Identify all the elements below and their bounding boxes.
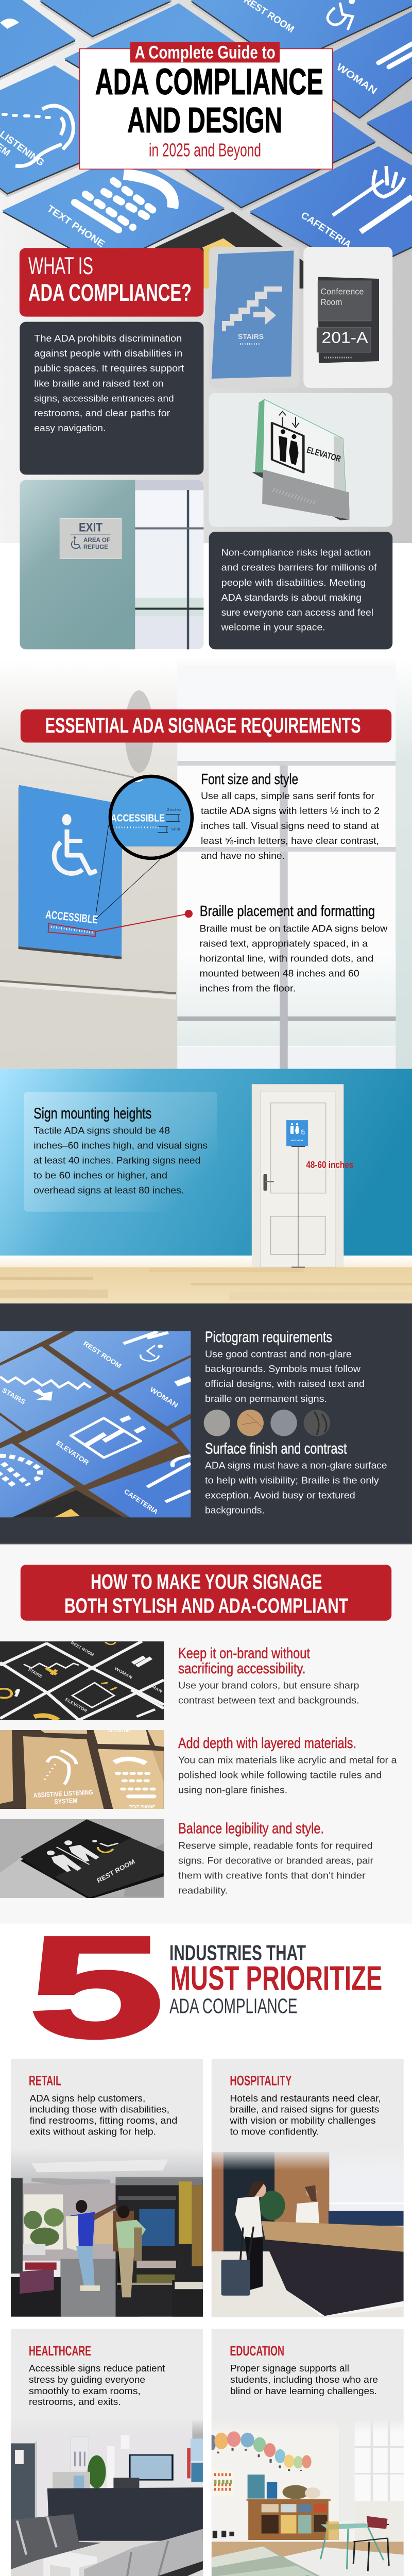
panel: non-compliance text: ADA standards is about making: [221, 592, 362, 603]
text: add depth with layered materials: You can mix materials like acrylic and metal for a: [178, 1755, 398, 1765]
text: font size and style: Font size and style: [201, 771, 298, 788]
text: keep it on-brand: Keep it on-brand without: [178, 1646, 310, 1662]
heading panel: what is ADA compliance: ADA COMPLIANCE?: [28, 279, 192, 306]
window frame and scenery: [177, 761, 396, 1069]
icon: wheelchair: [54, 814, 97, 873]
banner: how to make your signage: HOW TO MAKE YOUR SIGNAGE: [91, 1570, 322, 1594]
text: pictogram requirements: Use good contrast and non-glare: [205, 1349, 352, 1359]
text: balance legibility and style: Balance legibility and style.: [178, 1821, 324, 1837]
photo card: conference room sign: 201-A: [321, 329, 368, 347]
panel: ADA definition text: signs, accessible entrances and: [34, 393, 174, 403]
blue accessible sign: ACCESSIBLE: [45, 908, 98, 926]
photo: black signs on white: STAIRS: [27, 1667, 43, 1679]
title: ADA Compliance and Design: AND DESIGN: [127, 100, 282, 140]
hero photo: blue ADA signs laid out diagonally: [0, 0, 412, 289]
title label: A Complete Guide to: A Complete Guide to: [135, 43, 276, 63]
banner: essential ADA signage requirements: [21, 709, 391, 742]
text: education: Proper signage supports all: [230, 2363, 349, 2374]
photo: blue signs on wood: [0, 1331, 191, 1517]
label: 48-60 inches: 48-60 inches: [306, 1159, 353, 1170]
text: retail: [29, 2073, 177, 2137]
subtitle: in 2025 and Beyond: [149, 140, 261, 161]
door with sign: [252, 1084, 353, 1267]
small restroom sign: [286, 1120, 308, 1146]
text: font size and style: [201, 771, 380, 861]
photo: black rest room sign: REST ROOM: [96, 1858, 136, 1885]
text: hospitality: with vision or mobility challenges: [229, 2115, 376, 2126]
heading text: [169, 1941, 382, 2018]
text: education: EDUCATION: [230, 2343, 284, 2359]
exit plaque: AREA OF: [83, 536, 110, 544]
heading panel: what is ADA compliance: WHAT IS: [28, 252, 93, 279]
photo: gold signs on wood: ELEVATOR: [108, 1728, 130, 1733]
photo: black signs on white: ELEVATOR: [64, 1697, 88, 1714]
text: hero sign labels: CAFETERIA: [299, 210, 353, 250]
magnified detail of sign text: [108, 775, 194, 860]
photo: gold signs on wood: ASSISTIVE LISTENING: [33, 1788, 93, 1799]
text: surface finish and contrast: ADA signs must have a non-glare surface: [205, 1461, 387, 1471]
text: surface finish and contrast: [205, 1440, 387, 1516]
text: retail: exits without asking for help.: [30, 2127, 156, 2137]
heading text: INDUSTRIES THAT: [169, 1941, 306, 1965]
text: braille placement and formatting: inches from the floor.: [200, 983, 296, 993]
text: hospitality: HOSPITALITY: [230, 2073, 291, 2089]
photo: blue signs on wood: REST ROOM: [82, 1340, 123, 1370]
panel: non-compliance text: welcome in your space.: [221, 622, 325, 633]
panel: non-compliance text: and creates barriers for millions of: [221, 563, 377, 573]
photo: blue signs on wood: STAIRS: [1, 1386, 27, 1406]
blue accessible sign: [19, 785, 122, 959]
photo: gold signs on wood: [0, 1728, 164, 1809]
photo: blue signs on wood: ELEVATOR: [55, 1439, 91, 1467]
small restroom sign: REST ROOM: [291, 1139, 303, 1142]
photo: gold signs on wood: TEXT PHONE: [129, 1805, 156, 1809]
title: ADA Compliance and Design: [95, 62, 323, 140]
text: font size and style: tactile ADA signs with letters ½ inch to 2: [201, 806, 380, 816]
text: balance legibility and style: Reserve simple, readable fonts for required: [178, 1841, 373, 1851]
glass text panel: Sign mounting heights: [33, 1105, 151, 1122]
panel: non-compliance text: sure everyone can access and feel: [221, 607, 373, 618]
card: hospitality: [212, 2059, 404, 2317]
photo: hotel reception: [212, 2148, 404, 2317]
text: healthcare: [29, 2343, 165, 2407]
card: education: [209, 2329, 404, 2576]
measuring line: [291, 1146, 305, 1267]
photo: blue signs on wood: CAFETERIA: [123, 1487, 160, 1516]
exit plaque: EXIT: [79, 520, 102, 534]
text: add depth with layered materials: [178, 1735, 398, 1795]
photo card: elevator sign: [209, 393, 392, 527]
title box: [80, 42, 332, 169]
text: healthcare: HEALTHCARE: [29, 2343, 91, 2359]
text: keep it on-brand: Use your brand colors, but ensure sharp: [178, 1681, 359, 1691]
wall lines: [0, 748, 176, 997]
text: keep it on-brand: sacrificing accessibility.: [178, 1660, 305, 1677]
text: balance legibility and style: [178, 1821, 373, 1895]
photo card: elevator sign: ELEVATOR: [305, 445, 342, 464]
magnified detail of sign text: 2 inches: [167, 807, 181, 812]
photo: blue signs on wood: WOMAN: [148, 1385, 180, 1409]
text: healthcare: restrooms, and exits.: [29, 2397, 121, 2407]
photo: retail store: [11, 2148, 203, 2318]
banner: how to make your signage: [21, 1565, 391, 1621]
photo: gold signs on wood: SYSTEM: [54, 1797, 78, 1805]
callout lines to magnifier: [96, 825, 160, 919]
text: add depth with layered materials: polished look while following tactile rules and: [178, 1770, 382, 1780]
text: education: students, including those who are: [230, 2375, 378, 2385]
text: hospitality: Hotels and restaurants need clear,: [230, 2093, 381, 2104]
glass text panel: inches–60 inches high, and visual signs: [33, 1140, 208, 1150]
text: surface finish and contrast: Surface finish and contrast: [205, 1440, 347, 1457]
panel: non-compliance text: [209, 532, 392, 649]
braille highlight box: [48, 923, 96, 937]
glass text panel: at least 40 inches. Parking signs need: [33, 1156, 200, 1166]
text: hero sign labels: TEXT PHONE: [45, 204, 107, 250]
exit plaque: REFUGE: [83, 544, 108, 551]
section: essential ADA signage requirements: [0, 659, 412, 1069]
text: healthcare: smoothly to exam rooms,: [29, 2386, 141, 2396]
text: add depth with layered materials: Add depth with layered materials.: [178, 1735, 356, 1752]
section: sign mounting heights room: [0, 1069, 412, 1303]
text: healthcare: stress by guiding everyone: [29, 2375, 145, 2385]
text: balance legibility and style: signs. For decorative or branded areas, pair: [178, 1856, 373, 1866]
text: braille placement and formatting: mounted between 48 inches and 60: [200, 968, 359, 978]
section: pictogram and surface requirements: [0, 1303, 412, 1545]
text: keep it on-brand: [178, 1646, 359, 1705]
text: hospitality: [229, 2073, 381, 2137]
glass text panel: to be 60 inches or higher, and: [33, 1171, 167, 1181]
magnified detail of sign text: ⅝inch: [171, 828, 180, 832]
baseboard and wood floor: [0, 1256, 412, 1303]
text: braille placement and formatting: Braille must be on tactile ADA signs below: [200, 924, 388, 934]
heading panel: what is ADA compliance: [20, 248, 203, 317]
text: font size and style: least ⅝-inch letters, have clear contrast,: [201, 836, 379, 846]
photo card: conference room sign: Room: [320, 297, 342, 307]
photo: black rest room sign: [0, 1819, 164, 1900]
text: pictogram requirements: [205, 1329, 365, 1404]
text: surface finish and contrast: to help with visibility; Braille is the only: [205, 1476, 379, 1486]
photo: black signs on white: WOMAN: [114, 1666, 133, 1680]
icon: hero sign pictograms: [0, 0, 412, 232]
section: 5 industries heading: [28, 1906, 382, 2068]
panel: non-compliance text: people with disabilities. Meeting: [221, 578, 366, 588]
card: retail: [11, 2059, 203, 2318]
section: hero and what is ADA compliance background: [0, 0, 412, 659]
big number 5: 5: [28, 1906, 165, 2068]
photo: black signs on white: REST ROOM: [70, 1640, 95, 1657]
section: how to make signage stylish and compliant: [0, 1565, 397, 1898]
text: hero sign labels: [0, 0, 379, 250]
text: keep it on-brand: contrast between text and backgrounds.: [178, 1695, 359, 1705]
photo: black signs on white: [0, 1640, 164, 1720]
text: braille placement and formatting: raised text, appropriately spaced, in a: [200, 939, 368, 949]
heading text: ADA COMPLIANCE: [169, 1994, 298, 2018]
text: braille placement and formatting: horizontal line, with rounded dots, and: [200, 953, 373, 963]
text: pictogram requirements: official designs, with raised text and: [205, 1379, 365, 1389]
magnified detail of sign text: ACCESSIBLE: [111, 812, 165, 824]
callout: braille red pointer: [96, 910, 193, 931]
card: healthcare: [11, 2329, 203, 2576]
photo card: conference room sign: Conference: [320, 286, 364, 296]
glass text panel: [24, 1092, 217, 1212]
text: hero sign labels: WOMAN: [334, 62, 379, 96]
text: pictogram requirements: backgrounds. Symbols must follow: [205, 1364, 361, 1374]
material swatches: [204, 1410, 330, 1436]
text: balance legibility and style: them with creative fonts that don't hinder: [178, 1870, 366, 1880]
panel: non-compliance text: Non-compliance risks legal action: [221, 548, 371, 558]
photo card: conference room sign: [303, 247, 392, 388]
exit plaque: [60, 518, 122, 558]
panel: ADA definition text: public spaces. It requires support: [34, 363, 184, 374]
text: healthcare: Accessible signs reduce patient: [29, 2363, 165, 2374]
text: retail: find restrooms, fitting rooms, and: [30, 2115, 177, 2126]
text: balance legibility and style: readability.: [178, 1885, 228, 1895]
text: retail: RETAIL: [29, 2073, 61, 2089]
panel: ADA definition text: restrooms, and clear paths for: [34, 408, 170, 418]
text: education: blind or have learning challenges.: [230, 2386, 377, 2396]
text: pictogram requirements: braille on permanent signs.: [205, 1394, 327, 1404]
photo card: stairs sign: [209, 247, 300, 388]
panel: ADA definition text: like braille and raised text on: [34, 378, 164, 388]
panel: ADA definition text: The ADA prohibits discrimination: [34, 333, 182, 344]
panel: ADA definition text: against people with disabilities in: [34, 348, 182, 359]
text: surface finish and contrast: backgrounds.: [205, 1505, 265, 1516]
text: hospitality: braille, and raised signs for guests: [230, 2104, 379, 2114]
photo: clinic reception: [11, 2418, 203, 2576]
text: pictogram requirements: Pictogram requirements: [205, 1329, 332, 1346]
glass text panel: Tactile ADA signs should be 48: [33, 1126, 170, 1136]
glass text panel: overhead signs at least 80 inches.: [33, 1185, 184, 1195]
panel: ADA definition text: easy navigation.: [34, 423, 106, 433]
panel: ADA definition text: [20, 322, 203, 474]
text: font size and style: Use all caps, simple sans serif fonts for: [201, 791, 374, 801]
photo card: exit sign on teal wall: [20, 480, 204, 650]
text: retail: ADA signs help customers,: [30, 2093, 145, 2104]
text: braille placement and formatting: [200, 903, 388, 993]
photo card: stairs sign: STAIRS: [238, 332, 264, 341]
text: retail: including those with disabilities,: [30, 2104, 169, 2114]
text: hospitality: to move confidently.: [230, 2127, 319, 2137]
text: font size and style: and have no shine.: [201, 851, 285, 861]
text: hero sign labels: ELEVATOR: [177, 130, 225, 169]
photo: black signs on white: MAN: [151, 1684, 163, 1694]
text: font size and style: inches tall. Visual signs need to stand at: [201, 821, 379, 831]
text: education: [230, 2343, 378, 2396]
text: surface finish and contrast: exception. Avoid busy or textured: [205, 1490, 355, 1501]
photo: classroom: [209, 2418, 404, 2576]
text: braille placement and formatting: Braille placement and formatting: [200, 903, 375, 920]
text: add depth with layered materials: using non-glare finishes.: [178, 1785, 287, 1795]
